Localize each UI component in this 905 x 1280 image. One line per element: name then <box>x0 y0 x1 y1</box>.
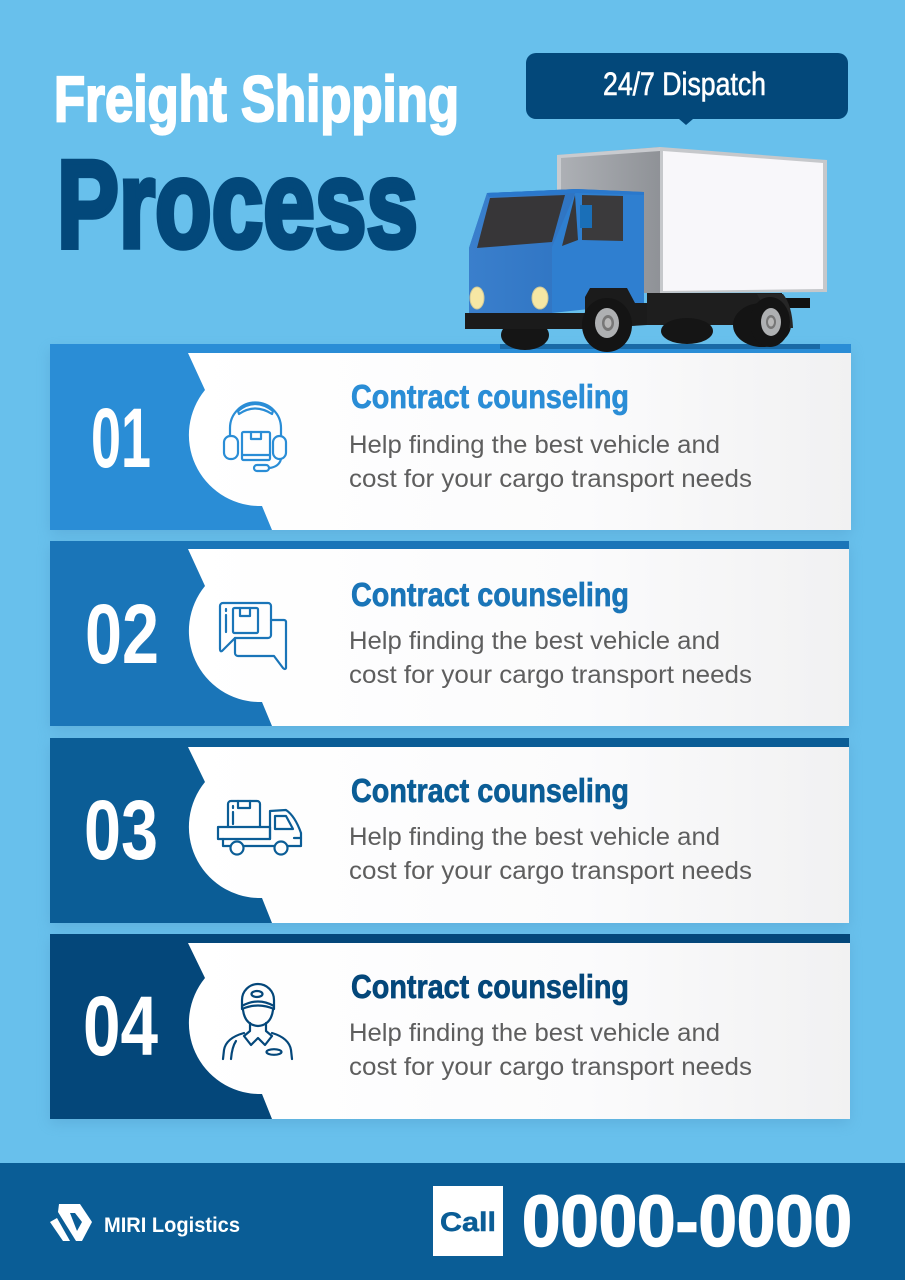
heading line: Freight Shipping: Freight Shipping <box>54 63 459 135</box>
heading line: Process: Process <box>57 136 418 274</box>
card shadows <box>50 350 851 1123</box>
description text: cost for your cargo transport needs <box>349 1053 752 1081</box>
panel: step 3 <box>50 738 849 923</box>
step number 01: 01 <box>91 391 151 485</box>
description text: cost for your cargo transport needs <box>349 857 752 885</box>
heading: Contract counseling: Contract counseling <box>351 576 629 613</box>
description text <box>349 627 752 689</box>
panel: step 4 <box>50 934 850 1119</box>
call badge: Call <box>440 1207 496 1237</box>
title: Freight Shipping Process <box>54 63 459 274</box>
company name: MIRI Logistics <box>104 1214 240 1237</box>
description text: Help finding the best vehicle and <box>349 627 720 655</box>
heading: Contract counseling: Contract counseling <box>351 378 629 415</box>
icon: headset with parcel <box>224 403 286 471</box>
illustration: blue delivery truck <box>465 147 827 352</box>
call badge <box>433 1186 503 1256</box>
description text: Help finding the best vehicle and <box>349 1019 720 1047</box>
phone number: 0000-0000 <box>522 1182 852 1262</box>
footer bar <box>0 1163 905 1280</box>
description text: Help finding the best vehicle and <box>349 823 720 851</box>
icon: delivery truck <box>218 801 301 854</box>
heading: Contract counseling: Contract counseling <box>351 968 629 1005</box>
logo mark <box>50 1204 92 1241</box>
step number 04: 04 <box>83 979 158 1073</box>
panel: step 1 <box>50 344 851 530</box>
step number 03: 03 <box>84 783 158 877</box>
icon: chat bubbles with parcel <box>220 603 286 669</box>
step number 02: 02 <box>85 587 159 681</box>
panel: step 2 <box>50 541 849 726</box>
icon: delivery worker <box>223 984 292 1059</box>
description text <box>349 823 752 885</box>
description text <box>349 431 752 493</box>
heading: Contract counseling: Contract counseling <box>351 772 629 809</box>
callout: 24/7 Dispatch <box>526 53 848 125</box>
description text: cost for your cargo transport needs <box>349 661 752 689</box>
description text: Help finding the best vehicle and <box>349 431 720 459</box>
description text: cost for your cargo transport needs <box>349 465 752 493</box>
description text <box>349 1019 752 1081</box>
callout: 24/7 Dispatch: 24/7 Dispatch <box>603 66 766 102</box>
